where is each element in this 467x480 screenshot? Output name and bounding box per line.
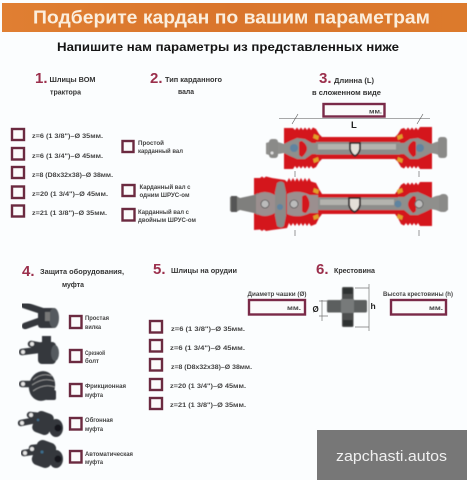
option: z=21: z=21 (1 3/8")–Ø 35мм.	[170, 402, 246, 409]
option: friction clutch: Фрикционная	[85, 383, 126, 390]
heading: section 4: 4.	[22, 263, 35, 280]
option: z=21: z=21 (1 3/8")–Ø 35мм.	[32, 210, 107, 217]
icon: automatic clutch	[23, 438, 63, 470]
option: plain yoke: вилка	[85, 324, 102, 331]
option: z=6 1 3/4: z=6 (1 3/4")–Ø 45мм.	[32, 153, 103, 160]
input: cup diameter: Диаметр чашки (Ø)	[248, 291, 306, 298]
input: cup diameter	[248, 291, 306, 314]
icon: plain yoke	[24, 305, 59, 328]
watermark: zapchasti.autos	[336, 448, 447, 465]
option: one CV joint	[122, 184, 191, 199]
option: z=6 1 3/8	[150, 321, 245, 333]
option: double CV joint: двойным ШРУС-ом	[138, 217, 196, 224]
option: z=6 1 3/8: z=6 (1 3/8")–Ø 35мм.	[32, 133, 103, 140]
option: simple shaft: карданный вал	[138, 148, 183, 155]
heading: section 1: трактора	[50, 88, 82, 96]
panel: section 6 universal joint cross	[248, 261, 453, 331]
input: length mm: мм.	[369, 108, 382, 116]
option: z=8: z=8 (D8x32x38)–Ø 38мм.	[32, 172, 113, 179]
heading: section 6: 6.	[316, 261, 329, 278]
option: shear bolt	[70, 350, 105, 365]
panel: section 1 tractor PTO splines	[12, 70, 113, 217]
option: plain yoke	[70, 315, 109, 331]
heading: section 3	[312, 70, 381, 97]
option: double CV joint	[122, 209, 196, 224]
option: double CV joint: Карданный вал с	[138, 209, 190, 216]
heading: section 4: муфта	[62, 280, 85, 289]
heading: section 2	[150, 70, 222, 96]
subtitle: Напишите нам параметры из представленных ниже	[57, 40, 399, 54]
heading: section 6	[316, 261, 376, 278]
heading: section 3: 3.	[319, 70, 332, 87]
dimension line L: L	[351, 120, 357, 131]
option: z=20: z=20 (1 3/4")–Ø 45мм.	[170, 383, 246, 390]
option: plain yoke: Простая	[85, 315, 109, 322]
dimension line L	[279, 114, 430, 236]
heading: section 1: Шлицы ВОМ	[50, 75, 96, 84]
heading: section 4: Защита оборудования,	[40, 267, 124, 276]
option: friction clutch	[70, 383, 126, 399]
option: z=6 1 3/4	[12, 148, 103, 160]
option: one CV joint: одним ШРУС-ом	[140, 192, 190, 199]
option: z=8: z=8 (D8x32x38)–Ø 38мм.	[171, 364, 252, 371]
option: z=8	[150, 359, 252, 371]
input: cross height	[383, 291, 453, 314]
icon: shear bolt	[21, 336, 59, 364]
option: z=6 1 3/8	[12, 129, 103, 140]
option: automatic clutch	[70, 451, 133, 466]
option: z=21	[150, 398, 246, 409]
option: z=8	[12, 167, 113, 179]
option: simple shaft: Простой	[138, 140, 164, 147]
panel: section 3 length	[230, 70, 448, 236]
option: z=20: z=20 (1 3/4")–Ø 45мм.	[32, 191, 108, 198]
heading: section 5	[153, 261, 237, 278]
panel: section 4 coupling protection	[20, 263, 133, 470]
option: z=6 1 3/4	[150, 340, 245, 352]
shaft diagram: double joint	[230, 176, 448, 231]
banner	[2, 3, 467, 32]
heading: section 4	[22, 263, 124, 289]
option: z=21	[12, 206, 107, 217]
option: friction clutch: муфта	[85, 392, 104, 399]
option: overrunning clutch: Обгонная	[85, 417, 113, 424]
option: z=6 1 3/4: z=6 (1 3/4")–Ø 45мм.	[170, 345, 245, 352]
panel: section 5 implement splines	[150, 261, 252, 409]
option: automatic clutch: Автоматическая	[85, 451, 133, 458]
heading: section 1: 1.	[35, 70, 48, 87]
input: cross height: мм.	[429, 305, 443, 312]
banner: Подберите кардан по вашим параметрам	[33, 6, 430, 28]
option: simple shaft	[122, 140, 183, 155]
input: cup diameter: мм.	[287, 305, 301, 312]
icon: cross with dimensions: h	[370, 301, 376, 311]
shaft diagram: single joint	[266, 127, 447, 169]
heading: section 3: Длинна (L)	[334, 76, 375, 85]
heading: section 5: 5.	[153, 261, 166, 278]
icon: cross with dimensions: Ø	[312, 305, 319, 314]
heading: section 6: Крестовина	[334, 266, 376, 275]
heading: section 2: Тип карданного	[165, 75, 222, 84]
icon: cross with dimensions	[312, 284, 376, 331]
panel: section 2 shaft type	[122, 70, 222, 224]
watermark	[317, 430, 467, 480]
option: overrunning clutch: муфта	[85, 426, 104, 433]
icon: overrunning clutch	[20, 410, 63, 437]
heading: section 2: вала	[178, 87, 195, 96]
option: z=6 1 3/8: z=6 (1 3/8")–Ø 35мм.	[171, 326, 245, 333]
option: shear bolt: Срезной	[85, 350, 105, 357]
input: cross height: Высота крестовины (h)	[383, 291, 453, 298]
icon: friction clutch	[21, 368, 58, 404]
option: overrunning clutch	[70, 417, 113, 433]
heading: section 1	[35, 70, 96, 96]
heading: section 2: 2.	[150, 70, 163, 87]
input: length mm	[324, 104, 384, 116]
option: z=20	[12, 186, 108, 198]
heading: section 5: Шлицы на орудии	[171, 266, 237, 275]
option: one CV joint: Карданный вал с	[140, 184, 191, 191]
option: shear bolt: болт	[85, 358, 99, 365]
heading: section 3: в сложенном виде	[312, 88, 381, 97]
option: automatic clutch: муфта	[85, 459, 104, 466]
option: z=20	[150, 379, 246, 390]
